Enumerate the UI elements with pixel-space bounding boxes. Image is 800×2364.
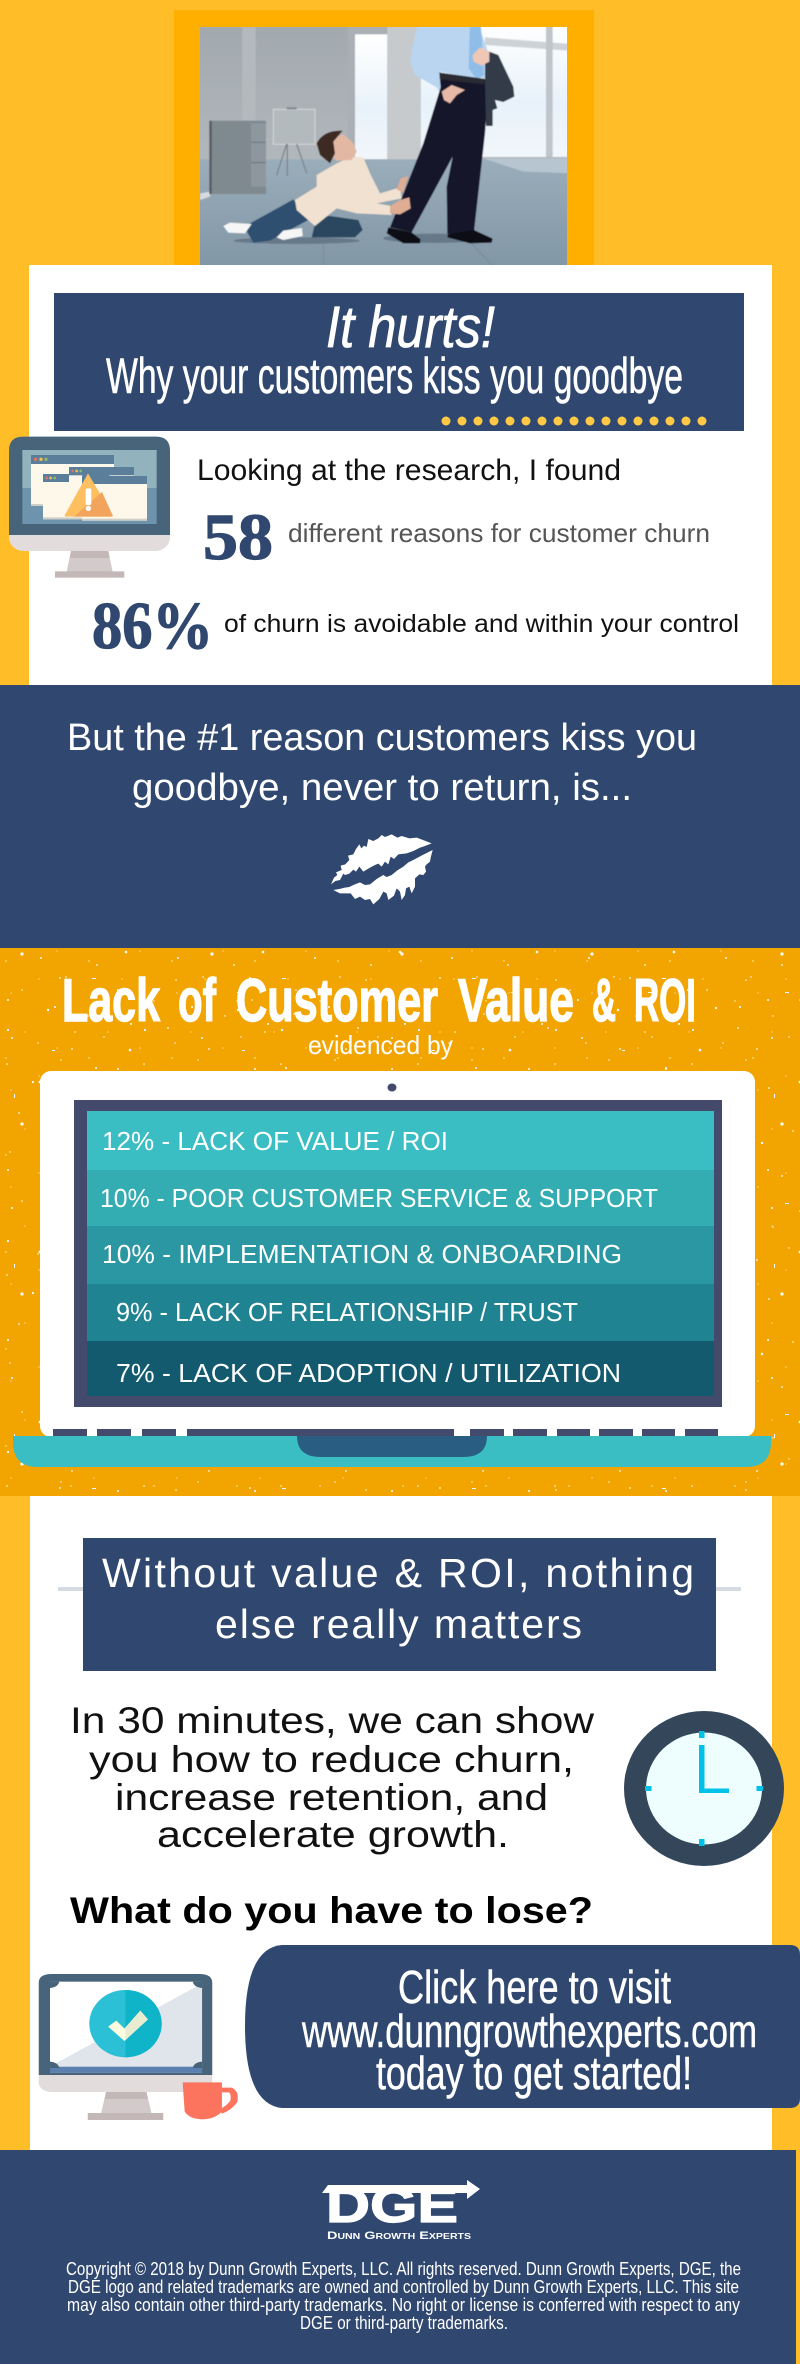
text: of churn avoidable: of churn is avoidable and within your control — [224, 610, 739, 638]
laptop chart — [13, 1071, 771, 1467]
heading: lack of customer value and ROI: Lack — [62, 967, 160, 1034]
row: 9 percent — [87, 1284, 714, 1341]
heading: lack of customer value and ROI: ROI — [634, 967, 696, 1034]
white panel: intro — [29, 265, 772, 685]
callout: without value and ROI — [83, 1538, 716, 1671]
row: 10 percent support — [87, 1170, 714, 1226]
panel: lack of customer value — [0, 948, 800, 1496]
row: 7 percent: 7% - LACK OF ADOPTION / UTILIZATION — [116, 1358, 621, 1388]
heading: lack of customer value and ROI: of — [178, 967, 217, 1034]
text: but the #1 reason: But the #1 reason customers kiss you — [67, 717, 697, 759]
text: copyright: DGE or third-party trademarks. — [300, 2313, 508, 2333]
panel: number one reason — [0, 685, 800, 948]
stat: 86%: 86% — [92, 589, 213, 663]
logo: DGE: DGE — [326, 2179, 458, 2233]
heading: lack of customer value and ROI — [62, 967, 696, 1034]
row: 9 percent: 9% - LACK OF RELATIONSHIP / TRUST — [116, 1297, 578, 1327]
text: copyright — [66, 2259, 741, 2333]
icon: monitor with warning — [9, 437, 170, 578]
text: looking at the research: Looking at the research, I found — [197, 454, 621, 487]
logo: DGE — [322, 2179, 480, 2242]
text: evidenced by: evidenced by — [308, 1030, 453, 1060]
title banner — [54, 293, 744, 431]
hero photo with orange frame — [174, 10, 594, 268]
icon: kiss lips — [331, 834, 433, 904]
row: 12 percent: 12% - LACK OF VALUE / ROI — [102, 1126, 448, 1156]
row: 12 percent — [87, 1111, 714, 1170]
heading: lack of customer value and ROI: Value — [458, 967, 574, 1034]
dotted ornament — [442, 416, 706, 426]
text: in 30 minutes: increase retention, and — [115, 1777, 548, 1818]
stat: 58: 58 — [203, 501, 273, 574]
text: what do you have to lose: What do you have to lose? — [70, 1890, 593, 1931]
text: different reasons: different reasons for customer churn — [288, 518, 710, 548]
text: in 30 minutes: you how to reduce churn, — [89, 1739, 574, 1780]
woman — [233, 237, 360, 244]
title: it hurts: It hurts! — [326, 295, 495, 360]
icon: monitor with check and mug — [39, 1974, 234, 2120]
button: call to action — [245, 1945, 800, 2108]
heading: lack of customer value and ROI: & — [592, 967, 616, 1034]
row: 7 percent — [87, 1341, 714, 1396]
heading: lack of customer value and ROI: Customer — [236, 967, 438, 1034]
icon: clock — [624, 1711, 784, 1866]
divider line — [58, 1587, 741, 1591]
logo: DGE: Dunn Growth Experts — [327, 2230, 472, 2242]
cta line 1: Click here to visit — [398, 1961, 671, 2013]
text: in 30 minutes: accelerate growth. — [157, 1814, 509, 1855]
man — [383, 234, 483, 243]
text: in 30 minutes: In 30 minutes, we can show — [70, 1700, 594, 1741]
cta line 3: today to get started! — [376, 2047, 692, 2099]
panel: footer — [0, 2150, 796, 2364]
row: 10 percent support: 10% - POOR CUSTOMER SERVICE & SUPPORT — [100, 1183, 658, 1213]
callout: without value and ROI: Without value & ROI, nothing — [102, 1550, 694, 1596]
text: in 30 minutes — [70, 1700, 594, 1855]
callout: without value and ROI: else really matters — [215, 1601, 582, 1647]
row: 10 percent onboarding — [87, 1226, 714, 1284]
row: 10 percent onboarding: 10% - IMPLEMENTATION & ONBOARDING — [102, 1239, 622, 1269]
text: goodbye never to return: goodbye, never to return, is... — [132, 767, 632, 809]
white panel: offer — [30, 1496, 772, 2150]
